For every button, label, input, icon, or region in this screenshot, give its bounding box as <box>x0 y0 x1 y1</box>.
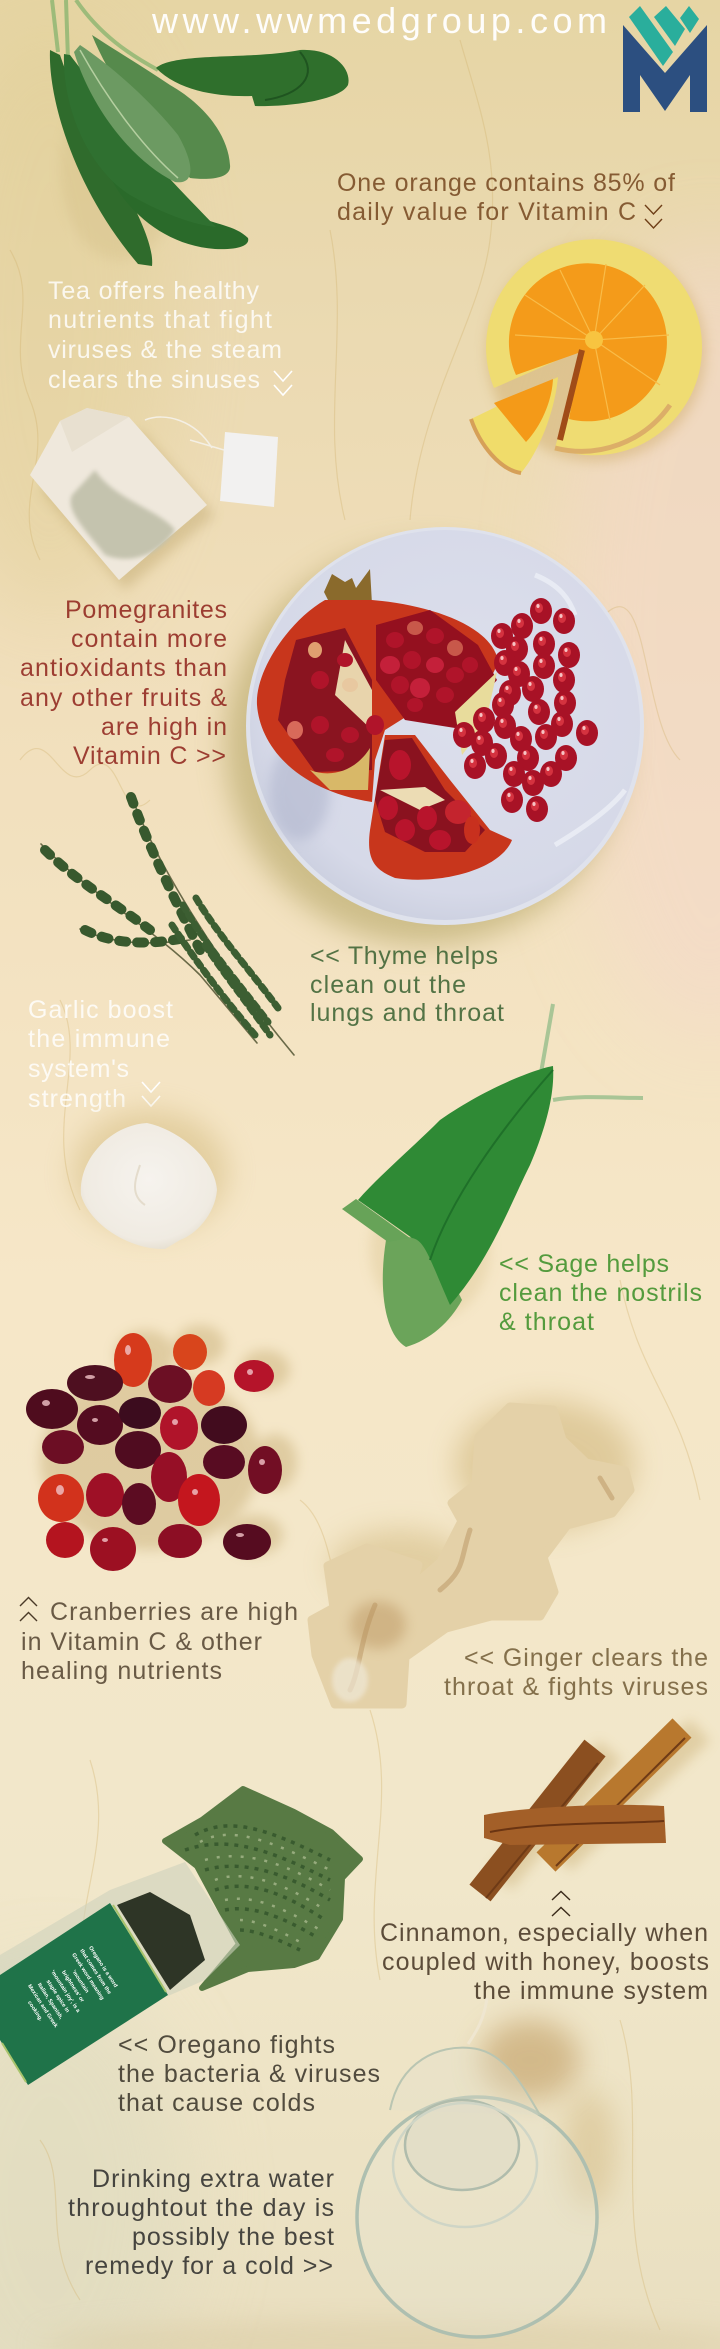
jar label text: cooking. <box>26 2000 44 2023</box>
icon: thyme <box>41 795 294 1055</box>
text: sage: << Sage helps <box>499 1250 669 1278</box>
text: pomegranates: are high in <box>101 713 227 741</box>
logo <box>623 6 707 112</box>
pomegranate crown <box>324 569 372 608</box>
oregano pile <box>165 1789 360 1988</box>
jar label text <box>17 1943 120 2036</box>
text: pomegranates: contain more <box>71 625 227 653</box>
text: pomegranates <box>20 596 227 770</box>
text: pomegranates: Vitamin C >> <box>73 742 226 770</box>
text: garlic: Garlic boost <box>28 996 173 1024</box>
text: orange: One orange contains 85% of <box>337 169 675 197</box>
text: water: remedy for a cold >> <box>85 2252 333 2280</box>
text: thyme: clean out the <box>310 971 466 999</box>
text: tea: viruses & the steam <box>48 336 282 364</box>
icon: sage bunch <box>50 0 349 266</box>
text: cranberries: Cranberries are high <box>50 1598 298 1626</box>
loose arils <box>453 598 598 822</box>
pomegranate interior <box>278 628 372 772</box>
text: water: throughtout the day is <box>68 2194 334 2222</box>
text: pomegranates: antioxidants than <box>20 654 227 682</box>
icon: single sage leaf <box>342 1004 643 1347</box>
text: pomegranates: any other fruits & <box>20 684 227 712</box>
text: oregano: the bacteria & viruses <box>118 2060 380 2088</box>
text: cranberries <box>20 1598 298 1685</box>
text: sage: clean the nostrils <box>499 1279 702 1307</box>
icon: glass of water <box>357 1998 616 2337</box>
text: ginger: throat & fights viruses <box>444 1673 708 1701</box>
pomegranate wedge <box>369 735 512 880</box>
text: tea: nutrients that fight <box>48 306 272 334</box>
text: oregano: << Oregano fights <box>118 2031 335 2059</box>
website url: www.wwmedgroup.com <box>151 0 607 41</box>
text: ginger: << Ginger clears the <box>464 1644 708 1672</box>
icon: garlic <box>72 1110 228 1249</box>
jar label text: 'mountain joy', is a <box>49 1969 81 2015</box>
text: garlic: system's <box>28 1055 129 1083</box>
jar glass <box>0 1862 240 1996</box>
icon: oregano jar and herbs <box>0 1789 360 2085</box>
jar label text: that comes from the <box>78 1948 112 1996</box>
icon: ginger root <box>312 1400 635 1704</box>
text: tea: clears the sinuses <box>48 366 260 394</box>
text: cranberries: healing nutrients <box>21 1657 222 1685</box>
text: tea <box>48 277 292 395</box>
text: cranberries: in Vitamin C & other <box>21 1628 262 1656</box>
text: orange <box>337 169 675 228</box>
text: cinnamon <box>380 1892 709 2005</box>
text: thyme <box>310 942 504 1027</box>
text: oregano: that cause colds <box>118 2089 315 2117</box>
text: orange: daily value for Vitamin C <box>337 198 636 226</box>
text: thyme: lungs and throat <box>310 999 504 1027</box>
jar label text: Italian, Spanish, <box>36 1982 64 2021</box>
text: sage: & throat <box>499 1308 594 1336</box>
jar label <box>0 1903 168 2085</box>
jar label text: Oregano is a word <box>87 1945 118 1989</box>
jar label text: brightness' or <box>60 1970 85 2004</box>
icon: orange slice <box>471 239 706 473</box>
text: sage <box>499 1250 702 1336</box>
text: garlic <box>28 996 173 1113</box>
icon: cinnamon sticks <box>480 1728 700 1898</box>
text: tea: Tea offers healthy <box>48 277 260 305</box>
text: pomegranates: Pomegranites <box>65 596 227 624</box>
jar label text: Mexican and Greek <box>26 1984 59 2030</box>
jar label text: staple spice in <box>45 1979 71 2015</box>
text: water: Drinking extra water <box>92 2165 334 2193</box>
text: garlic: the immune <box>28 1025 170 1053</box>
icon: tea bag <box>30 408 278 590</box>
text: cinnamon: coupled with honey, boosts <box>382 1948 709 1976</box>
icon: cranberries <box>26 1325 297 1571</box>
icon: pomegranate plate <box>225 527 644 945</box>
text: cinnamon: Cinnamon, especially when <box>380 1919 708 1947</box>
jar label text: Greek word meaning <box>70 1952 105 2001</box>
text: water <box>68 2165 334 2280</box>
text: oregano <box>118 2031 380 2117</box>
pomegranate body <box>257 600 498 802</box>
text: thyme: << Thyme helps <box>310 942 498 970</box>
jar label text: 'mountain <box>70 1969 90 1995</box>
text: ginger <box>444 1644 708 1701</box>
text: water: possibly the best <box>132 2223 334 2251</box>
text: cinnamon: the immune system <box>474 1977 708 2005</box>
text: garlic: strength <box>28 1085 126 1113</box>
pomegranate arils in fruit <box>287 621 478 762</box>
